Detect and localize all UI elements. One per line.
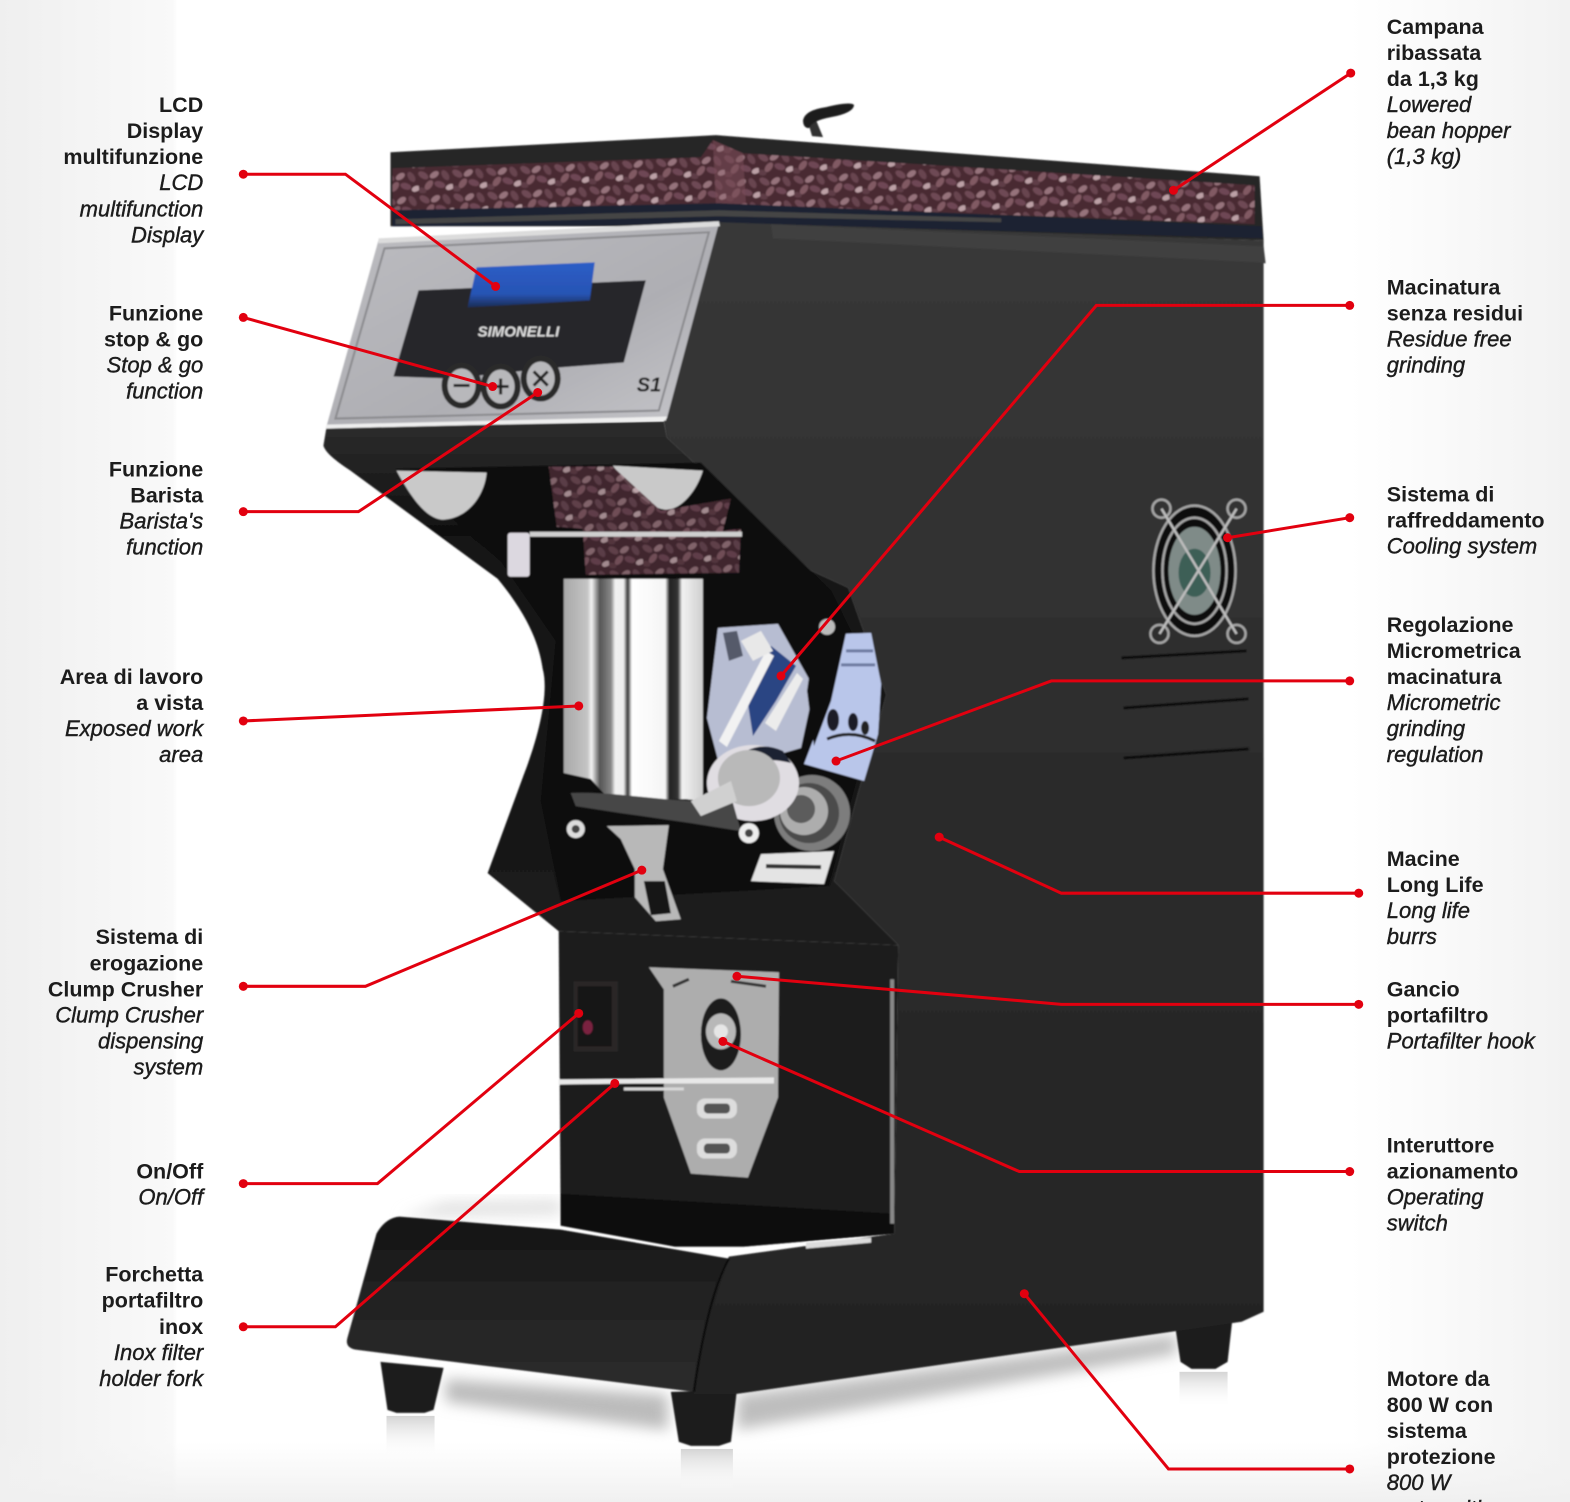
label: Micrometric (1387, 690, 1501, 715)
label: Gancio (1387, 977, 1460, 1001)
label: Long Life (1387, 873, 1484, 897)
LCD screen (468, 262, 595, 307)
brand logo: SIMONELLI (478, 323, 560, 340)
label: Clump Crusher (48, 977, 204, 1001)
callout: portafilter fork (99, 1079, 619, 1391)
label: Barista's (120, 509, 203, 534)
underside chrome cups (397, 466, 703, 520)
hopper (390, 135, 1264, 240)
label: sistema (1387, 1419, 1468, 1443)
label: portafiltro (102, 1289, 203, 1313)
label: Macine (1387, 847, 1460, 871)
label: grinding (1387, 716, 1466, 741)
label: Residue free (1387, 326, 1512, 351)
callout: cooling system (1223, 483, 1545, 559)
label: Cooling system (1387, 534, 1537, 559)
label: bean hopper (1387, 118, 1512, 143)
cooling fan (1150, 500, 1246, 643)
label: LCD (159, 93, 203, 117)
callout: portafilter hook (732, 972, 1536, 1053)
label: Barista (130, 484, 204, 508)
label: function (126, 379, 203, 404)
label: senza residui (1387, 301, 1523, 325)
callout: micrometric regulation (832, 613, 1522, 767)
label: LCD (159, 170, 203, 195)
dark display surround (394, 280, 646, 379)
label: Display (127, 119, 203, 143)
label: da 1,3 kg (1387, 67, 1479, 91)
callout: residue free grinding (776, 275, 1523, 680)
label: stop & go (104, 327, 203, 351)
chrome portafilter hook plate (649, 967, 779, 1178)
control panel (325, 221, 720, 429)
label: Exposed work (65, 716, 204, 741)
label: 800 W con (1387, 1393, 1493, 1417)
floor band (0, 1442, 1570, 1502)
label: multifunction (80, 196, 203, 221)
hopper chute beans (508, 467, 742, 577)
label: burrs (1387, 924, 1437, 949)
label: Clump Crusher (55, 1002, 205, 1027)
grinding disc (774, 775, 850, 851)
label: Area di lavoro (60, 665, 203, 689)
label: On/Off (138, 1185, 206, 1210)
blue micrometric plate (804, 633, 881, 781)
label: Regolazione (1387, 613, 1514, 637)
callout: bean hopper (1169, 15, 1512, 195)
label: Funzione (109, 458, 203, 482)
portafilter fork rail (559, 1077, 774, 1090)
buttons (442, 355, 561, 410)
label: function (126, 535, 203, 560)
machine base front (347, 1217, 729, 1392)
label: system (134, 1054, 203, 1079)
label: Lowered (1387, 92, 1472, 117)
label: Portafilter hook (1387, 1028, 1536, 1053)
label: multifunzione (63, 145, 203, 169)
label: protezione (1387, 1445, 1496, 1469)
work area opening (396, 463, 881, 901)
feet (380, 1318, 1233, 1446)
side vents (1121, 651, 1249, 758)
chrome cap (707, 745, 799, 821)
label: switch (1387, 1211, 1448, 1236)
label: Inox filter (114, 1340, 205, 1365)
label: Operating (1387, 1185, 1484, 1210)
base edge line (694, 1259, 729, 1392)
chrome burr assembly (707, 619, 850, 884)
label: Stop & go (107, 352, 203, 377)
callout: clump crusher (48, 866, 646, 1079)
label: Funzione (109, 301, 203, 325)
label: macinatura (1387, 665, 1503, 689)
label: dispensing (98, 1028, 204, 1053)
label: azionamento (1387, 1160, 1518, 1184)
label: area (159, 742, 203, 767)
machine front face (323, 422, 898, 945)
label: Interuttore (1387, 1134, 1494, 1158)
label: Long life (1387, 898, 1470, 923)
label: ribassata (1387, 41, 1482, 65)
lower column inner shadow (561, 1194, 894, 1247)
callout: on/off (136, 1009, 583, 1210)
label: erogazione (90, 951, 203, 975)
callout: motor (1020, 1289, 1496, 1502)
chamber base and screws (567, 781, 759, 843)
label: a vista (136, 691, 204, 715)
label: Forchetta (105, 1263, 204, 1287)
base slot (806, 1238, 871, 1249)
model mark: S1 (637, 375, 661, 397)
machine: grinder illustration (323, 104, 1266, 1446)
hopper knob (803, 104, 854, 137)
label: Display (131, 222, 205, 247)
machine side face (664, 222, 1264, 1394)
lower column (559, 931, 898, 1247)
lid lip (771, 224, 1266, 263)
on/off switch (574, 981, 618, 1051)
callout: operating switch (718, 1037, 1518, 1236)
callout: exposed work area (60, 665, 583, 767)
stainless chamber (564, 579, 703, 801)
label: (1,3 kg) (1387, 144, 1461, 169)
callout: long life burrs (935, 833, 1484, 949)
label: grinding (1387, 352, 1466, 377)
callout: stop and go (104, 301, 497, 404)
label: Motore da (1387, 1367, 1491, 1391)
column side strip (890, 979, 894, 1224)
floor shadow and reflections (386, 1200, 1228, 1491)
clump crusher spout (607, 825, 681, 921)
label: Campana (1387, 15, 1485, 39)
label: Micrometrica (1387, 639, 1522, 663)
label: 800 W (1387, 1470, 1453, 1495)
callout: barista function (109, 388, 542, 560)
label: holder fork (99, 1366, 204, 1391)
label: regulation (1387, 742, 1483, 767)
label: Sistema di (1387, 483, 1494, 507)
label: Sistema di (96, 925, 203, 949)
label: Macinatura (1387, 275, 1501, 299)
label: On/Off (136, 1160, 204, 1184)
label: portafiltro (1387, 1003, 1488, 1027)
callout: LCD display (63, 93, 500, 291)
coffee beans band (392, 140, 1255, 224)
label: raffreddamento (1387, 509, 1545, 533)
label: inox (159, 1315, 203, 1339)
